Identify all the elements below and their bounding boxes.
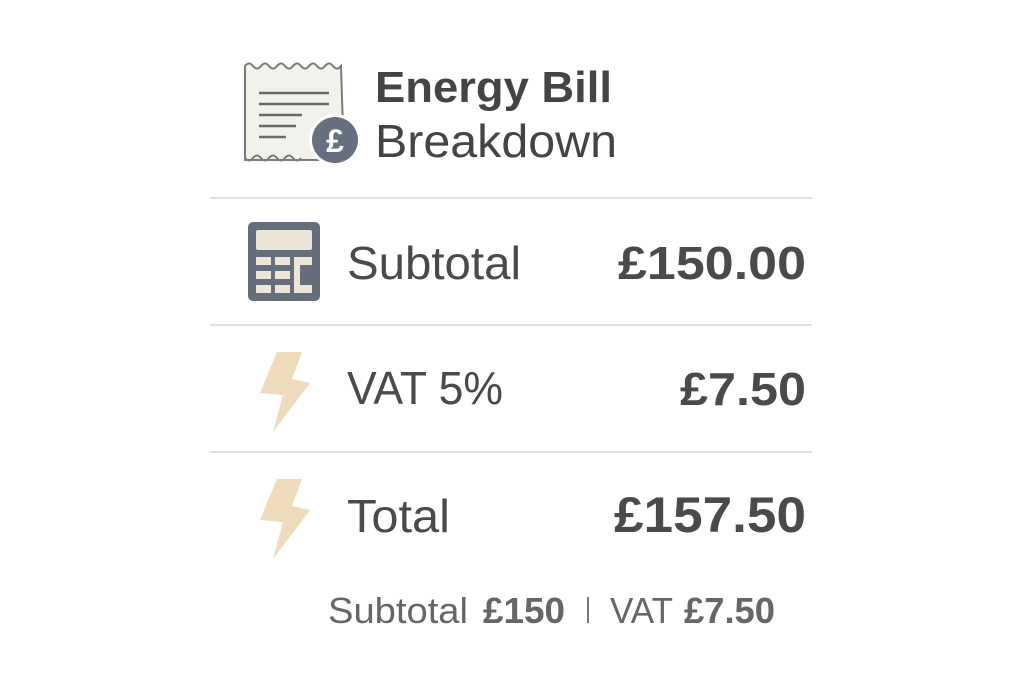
footer summary: VAT (610, 590, 673, 631)
footer summary (328, 590, 775, 631)
footer summary: £150 (483, 590, 565, 631)
title: Energy Bill (375, 63, 612, 112)
icon: receipt with pound coin: £ (326, 123, 344, 159)
title: Breakdown (375, 115, 617, 167)
row: subtotal: Subtotal (347, 237, 521, 289)
icon: receipt with pound coin (245, 64, 361, 166)
row: total: Total (347, 490, 450, 542)
row: VAT: VAT 5% (347, 362, 503, 414)
row: VAT (260, 352, 806, 432)
icon: lightning bolt (260, 479, 310, 559)
icon: lightning bolt (260, 352, 310, 432)
row: subtotal (248, 222, 806, 301)
title (375, 63, 617, 167)
footer summary: Subtotal (328, 590, 468, 631)
row: total: £157.50 (614, 487, 806, 543)
row: VAT: £7.50 (680, 363, 806, 415)
footer summary: £7.50 (684, 590, 775, 631)
row: total (260, 479, 806, 559)
row: subtotal: £150.00 (618, 237, 806, 289)
icon: calculator (248, 222, 320, 301)
